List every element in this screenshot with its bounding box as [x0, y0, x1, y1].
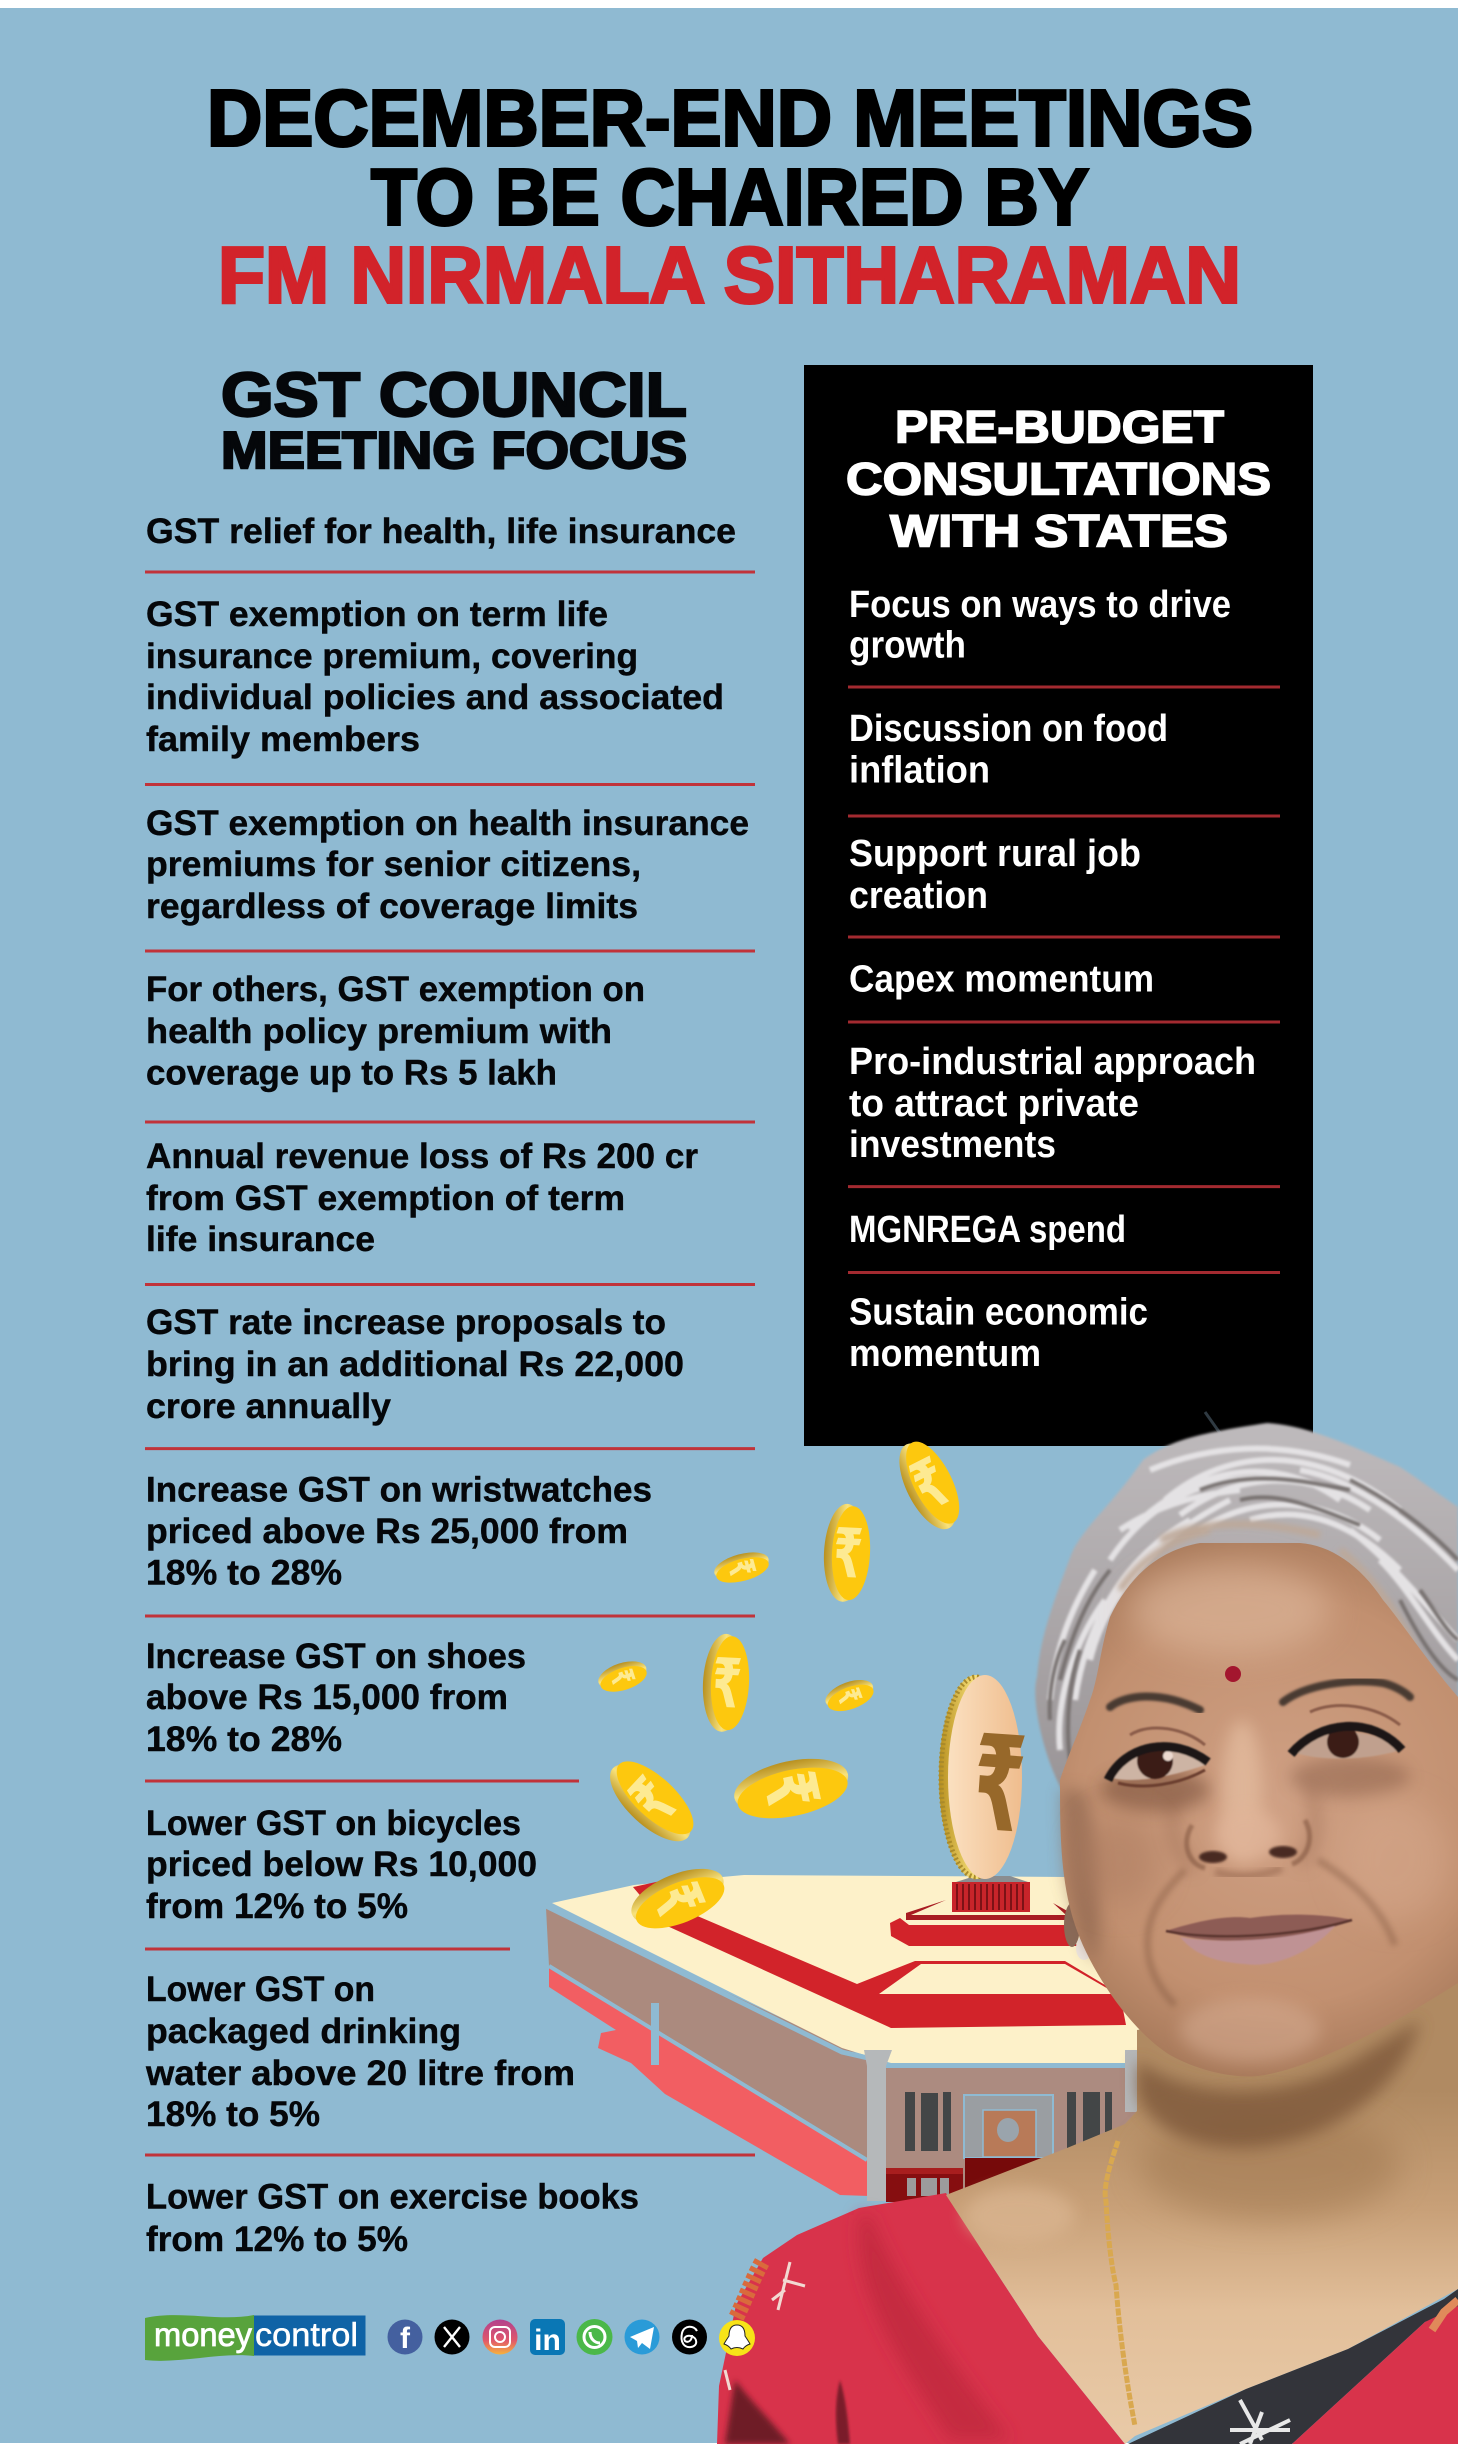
logo: moneycontrol: control	[255, 2316, 358, 2353]
item: bicycles: priced below Rs 10,000	[146, 1845, 537, 1884]
item: GST relief: GST relief for health, life insurance	[146, 512, 736, 551]
coin 8	[729, 1750, 854, 1827]
right eye	[1291, 1706, 1402, 1759]
photo-style illustration: Nirmala Sitharaman	[717, 1412, 1458, 2444]
item: term life exemption	[146, 595, 724, 759]
item: bicycles: from 12% to 5%	[146, 1887, 408, 1926]
icon: X	[434, 2320, 470, 2354]
item: food inflation: inflation	[849, 750, 990, 792]
coin 8: ₹	[746, 1764, 836, 1816]
item: packaged water	[145, 1970, 575, 2134]
illustration: parliament building	[546, 1875, 1140, 2202]
item: food inflation: Discussion on food	[849, 708, 1168, 750]
item: rural job creation	[849, 833, 1141, 917]
coin 2: ₹	[831, 1514, 865, 1595]
left eye	[1108, 1728, 1208, 1786]
item: term life exemption: individual policies and associated	[146, 678, 724, 717]
logo: moneycontrol: money	[154, 2316, 252, 2353]
heading: GST Council meeting focus: MEETING FOCUS	[221, 422, 687, 480]
item: rate increase proposals: crore annually	[146, 1387, 392, 1426]
panel: pre-budget consultations	[804, 365, 1313, 1446]
coin 2	[821, 1503, 873, 1603]
item: growth	[849, 584, 1231, 666]
item: pro-industrial	[849, 1041, 1256, 1166]
heading: GST Council meeting focus	[221, 361, 687, 480]
icon: threads	[672, 2320, 707, 2354]
item: rural job creation: creation	[849, 875, 988, 917]
item: wristwatches: 18% to 28%	[146, 1554, 342, 1592]
item: rate increase proposals	[146, 1303, 684, 1426]
heading: GST Council meeting focus: GST COUNCIL	[221, 361, 687, 430]
coin 7	[598, 1748, 706, 1854]
item: packaged water: water above 20 litre from	[145, 2054, 575, 2093]
item: bicycles: Lower GST on bicycles	[146, 1804, 521, 1843]
coin 3	[711, 1547, 772, 1588]
panel: GST Council meeting focus	[145, 361, 755, 2259]
item: shoes	[146, 1637, 526, 1759]
title	[207, 74, 1253, 320]
item: packaged water: 18% to 5%	[146, 2095, 320, 2134]
icon: linkedin: in	[534, 2324, 561, 2357]
heading: pre-budget consultations: CONSULTATIONS	[846, 454, 1271, 504]
title: TO BE CHAIRED BY	[371, 152, 1089, 242]
item: growth: growth	[849, 624, 966, 666]
icon: big rupee coin	[939, 1675, 1030, 1879]
heading: pre-budget consultations: PRE-BUDGET	[895, 402, 1224, 452]
neck and chest	[946, 1970, 1458, 2444]
item: term life exemption: GST exemption on term life	[146, 595, 608, 634]
item: economic momentum: Sustain economic	[849, 1292, 1148, 1334]
coin 1: ₹	[899, 1443, 962, 1527]
icon: whatsapp	[576, 2319, 612, 2355]
coin 1	[888, 1433, 971, 1538]
item: packaged water: Lower GST on	[146, 1970, 375, 2009]
coin 6: ₹	[828, 1684, 868, 1709]
face shading	[1062, 1565, 1450, 2062]
item: term life exemption: insurance premium, covering	[146, 637, 638, 676]
nose	[1187, 1820, 1310, 1876]
blouse	[717, 2193, 1125, 2444]
item: pro-industrial: Pro-industrial approach	[849, 1041, 1256, 1083]
icon: facebook	[388, 2320, 422, 2355]
icon: linkedin	[530, 2319, 565, 2357]
item: senior citizens exemption: GST exemption on health insurance	[146, 804, 749, 843]
item: pro-industrial: investments	[849, 1124, 1056, 1166]
item: health policy exemption: health policy premium with	[146, 1012, 612, 1051]
item: shoes: Increase GST on shoes	[146, 1637, 526, 1676]
hair	[1035, 1412, 1458, 1790]
item: rate increase proposals: bring in an additional Rs 22,000	[146, 1345, 684, 1384]
coin 5	[700, 1633, 752, 1733]
item: wristwatches: Increase GST on wristwatches	[146, 1471, 652, 1510]
item: exercise books: Lower GST on exercise books	[146, 2178, 639, 2217]
coin 9: ₹	[637, 1873, 719, 1928]
necklace	[1105, 2141, 1135, 2426]
title: DECEMBER-END MEETINGS	[207, 74, 1253, 162]
item: bicycles	[146, 1804, 537, 1926]
item: food inflation	[849, 708, 1168, 792]
coin 4	[595, 1656, 651, 1697]
icons: falling gold coins	[595, 1433, 971, 1940]
item: health policy exemption: For others, GST exemption on	[146, 970, 645, 1009]
coin 3: ₹	[718, 1555, 763, 1581]
bindi	[1225, 1666, 1241, 1682]
item: shoes: above Rs 15,000 from	[146, 1678, 508, 1717]
item: packaged water: packaged drinking	[146, 2012, 461, 2051]
social media icons	[388, 2319, 755, 2357]
ear and earring	[1064, 1903, 1092, 1960]
item: rural job creation: Support rural job	[849, 833, 1141, 875]
item: revenue loss: life insurance	[146, 1220, 375, 1259]
item: exercise books: from 12% to 5%	[146, 2220, 408, 2259]
coin 6	[822, 1674, 878, 1717]
item: economic momentum: momentum	[849, 1333, 1041, 1375]
sari pallu	[1128, 2289, 1458, 2444]
icon: facebook: f	[400, 2322, 411, 2355]
face	[1060, 1543, 1458, 2076]
title: FM NIRMALA SITHARAMAN	[218, 230, 1241, 320]
coin 5: ₹	[710, 1644, 744, 1725]
item: health policy exemption: coverage up to Rs 5 lakh	[146, 1054, 557, 1092]
item: wristwatches: priced above Rs 25,000 from	[146, 1512, 628, 1551]
item: term life exemption: family members	[146, 720, 420, 759]
heading: pre-budget consultations	[846, 402, 1271, 556]
item: health policy exemption	[146, 970, 645, 1092]
icon: instagram	[482, 2320, 518, 2354]
item: rate increase proposals: GST rate increase proposals to	[146, 1303, 666, 1342]
item: senior citizens exemption: premiums for senior citizens,	[146, 845, 641, 884]
icon: telegram	[624, 2320, 660, 2354]
logo: moneycontrol	[145, 2315, 366, 2361]
item: MGNREGA: MGNREGA spend	[849, 1209, 1126, 1251]
item: growth: Focus on ways to drive	[849, 584, 1231, 626]
icon: big rupee coin: ₹	[968, 1708, 1030, 1864]
item: economic momentum	[849, 1292, 1148, 1375]
item: pro-industrial: to attract private	[849, 1083, 1139, 1125]
mouth	[1166, 1915, 1352, 1965]
item: revenue loss: Annual revenue loss of Rs 200 cr	[146, 1137, 698, 1176]
item: exercise books	[146, 2178, 639, 2259]
coin 7: ₹	[615, 1763, 693, 1839]
item: revenue loss: from GST exemption of term	[146, 1179, 625, 1218]
item: senior citizens exemption: regardless of coverage limits	[146, 887, 638, 926]
icon: snapchat	[719, 2320, 755, 2356]
heading: pre-budget consultations: WITH STATES	[890, 506, 1228, 556]
coin 4: ₹	[601, 1665, 641, 1690]
item: revenue loss	[146, 1137, 698, 1259]
item: wristwatches	[146, 1471, 652, 1592]
coin 9	[624, 1858, 733, 1940]
item: senior citizens exemption	[146, 804, 749, 926]
item: shoes: 18% to 28%	[146, 1720, 342, 1759]
item: capex: Capex momentum	[849, 958, 1154, 1000]
eyebrows	[1110, 1681, 1410, 1710]
